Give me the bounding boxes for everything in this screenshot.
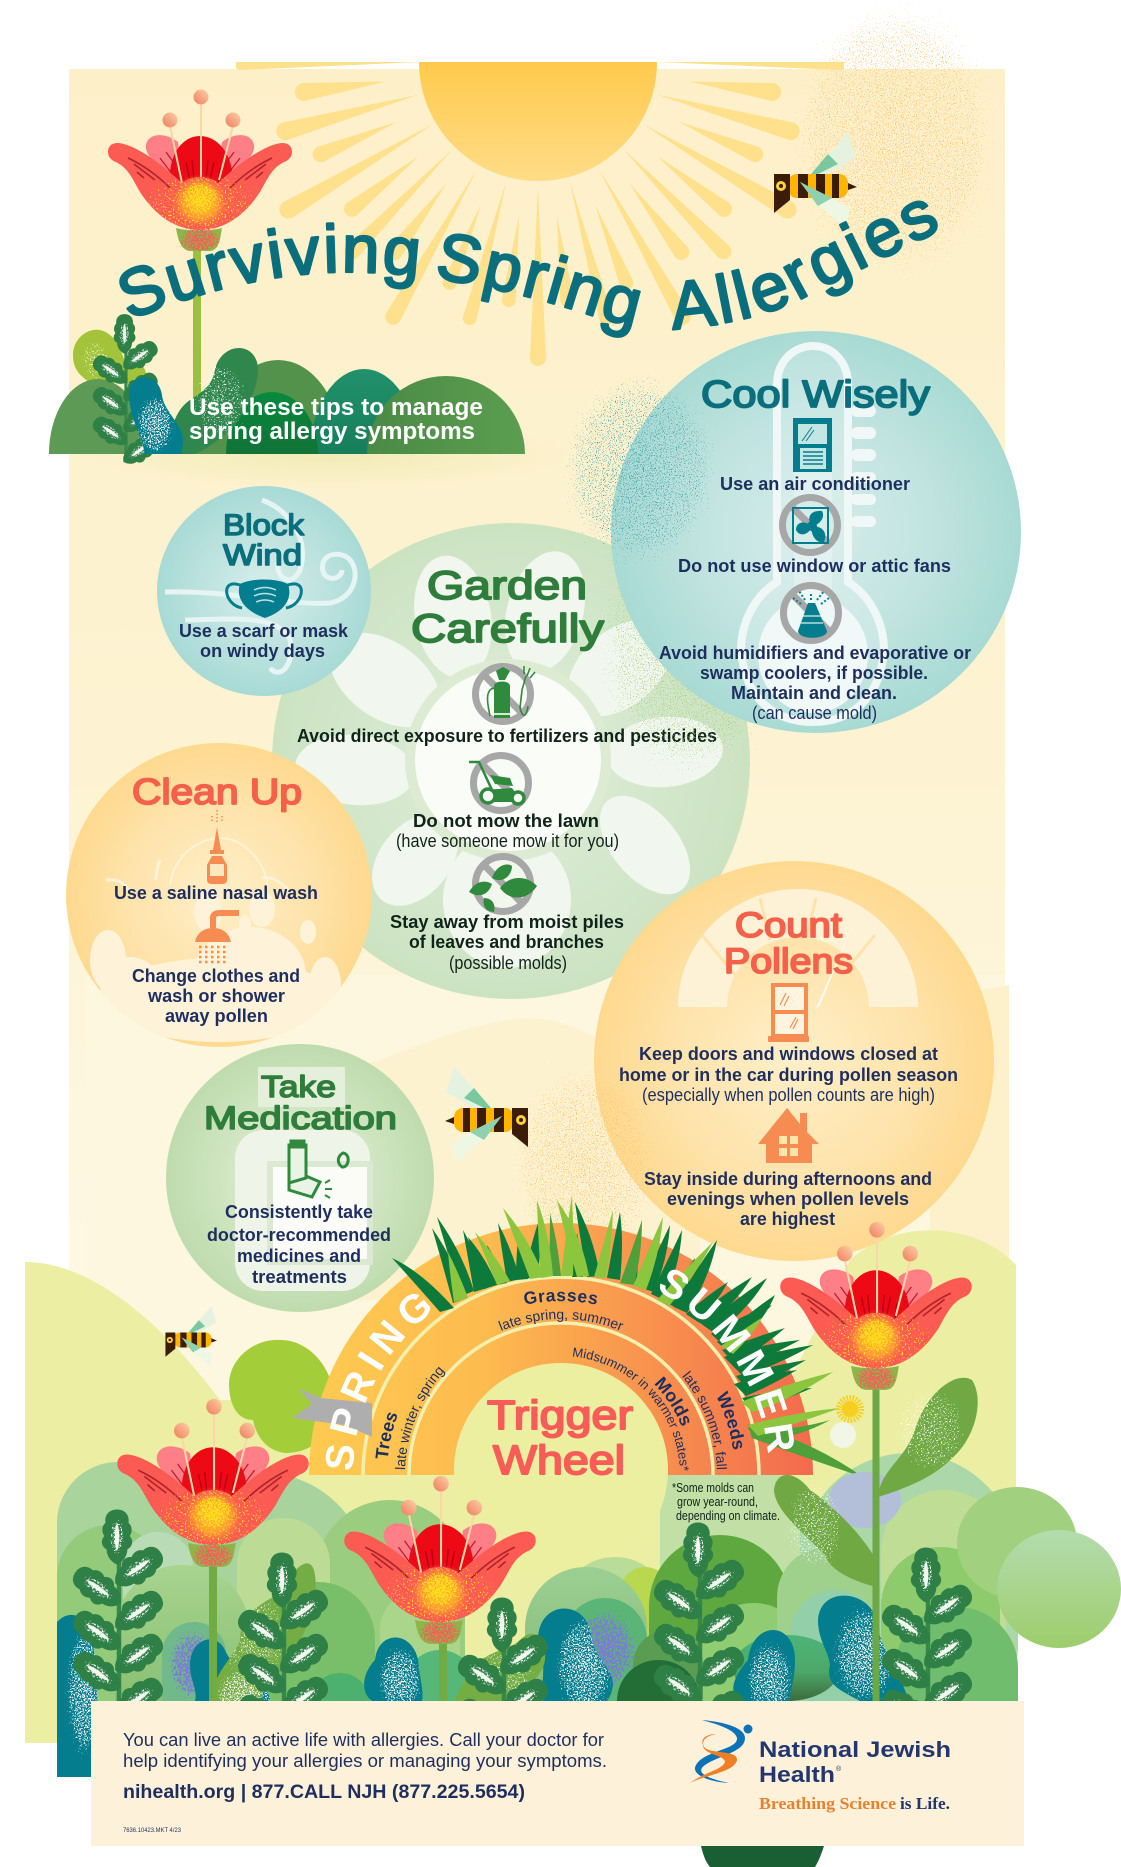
centre circle	[454, 1363, 668, 1577]
title: Surviving	[119, 222, 419, 316]
text: fertilizers: Avoid direct exposure to fertilizers and pesticides	[297, 725, 717, 746]
bottom green tab	[701, 1846, 824, 1867]
trigger: grasses: Grasses	[524, 1291, 598, 1304]
green pollen speckle	[570, 460, 810, 820]
text: humidifiers	[659, 642, 971, 723]
trigger: grasses	[498, 1291, 624, 1331]
balls, far right	[957, 1487, 1121, 1648]
tree	[229, 1340, 333, 1453]
middle flower	[344, 1476, 536, 1701]
background hills	[25, 975, 1016, 1743]
dandelions	[830, 1398, 861, 1448]
title: Spring	[438, 234, 641, 338]
heading: Clean Up	[132, 771, 302, 812]
flower petals decoration	[292, 542, 726, 968]
logo: national jewish health: is Life.	[900, 1794, 950, 1813]
grass	[392, 1195, 863, 1477]
logo: national jewish health: ®	[836, 1765, 842, 1773]
text: mow	[396, 810, 619, 851]
heading	[724, 906, 853, 981]
text: shower	[132, 965, 300, 1026]
footer message	[123, 1730, 607, 1834]
footer message: help identifying your allergies or managing your symptoms.	[123, 1751, 607, 1771]
text: doors and windows: (especially when pollen counts are high)	[642, 1085, 935, 1105]
panel: block wind	[157, 486, 371, 696]
footer message: You can live an active life with allergies. Call your doctor for	[123, 1730, 604, 1750]
text: Consistently take	[225, 1201, 373, 1222]
panel: count pollens	[594, 861, 994, 1261]
heading: Medication	[204, 1100, 397, 1136]
sun with rays	[236, 62, 844, 366]
trigger: weeds: Weeds	[717, 1390, 744, 1450]
heading	[204, 1069, 397, 1136]
icon: sprayer	[476, 666, 535, 722]
trigger: grasses: late spring, summer	[498, 1310, 624, 1331]
text: stay inside: Stay inside during afternoons and	[644, 1168, 932, 1189]
trigger: molds: Molds	[654, 1376, 690, 1426]
scene: ground foliage front layer	[57, 1535, 1018, 1777]
hills with subtitle, top left	[49, 314, 580, 548]
molds footnote: *Some molds can	[672, 1481, 754, 1495]
text: mow: (have someone mow it for you)	[396, 831, 619, 851]
icon: thermometer outline	[741, 346, 884, 722]
icon: leaves	[469, 856, 537, 912]
white speckle on leaves	[66, 1603, 890, 1759]
subtitle: Use these tips to manage	[189, 394, 483, 421]
icon: lawn mower	[469, 756, 528, 810]
scene: ground foliage back layer	[57, 1453, 1018, 1701]
text: humidifiers: swamp coolers, if possible.	[700, 662, 928, 683]
icon: inhaler	[289, 1141, 348, 1198]
text: moist piles	[390, 911, 624, 973]
tree trunk	[292, 1388, 372, 1437]
text: stay inside	[644, 1168, 932, 1229]
teal pollen speckle	[540, 345, 740, 595]
teal leaves	[57, 1596, 908, 1777]
icon: no humidifier	[784, 586, 838, 640]
text: mow: Do not mow the lawn	[413, 810, 599, 831]
text: on windy days	[200, 640, 325, 661]
orange pollen speckle, lower	[490, 1035, 680, 1295]
molds footnote: grow year-round,	[677, 1495, 758, 1509]
text: shower: away pollen	[165, 1005, 268, 1026]
icon: no fan	[782, 498, 838, 552]
green leaves	[210, 1563, 545, 1701]
text: medicines and	[237, 1245, 361, 1266]
flower, top left	[108, 90, 292, 400]
right flower with leaves	[774, 1222, 978, 1701]
subtitle: spring allergy symptoms	[189, 418, 475, 445]
text: doors and windows: Keep doors and windows closed at	[639, 1043, 938, 1064]
bottom-left flower	[117, 1399, 309, 1701]
heading: Cool Wisely	[701, 374, 930, 416]
icon: shower	[195, 913, 239, 962]
logo: national jewish health: National Jewish	[759, 1737, 951, 1762]
molds footnote: depending on climate.	[676, 1509, 780, 1523]
text	[179, 620, 349, 661]
heading	[223, 509, 305, 572]
icon: window	[768, 985, 809, 1042]
logo: national jewish health: Breathing Science	[759, 1794, 896, 1813]
decorative shapes	[235, 1067, 370, 1291]
foam decoration	[90, 838, 341, 1042]
text: stay inside: are highest	[740, 1208, 835, 1229]
title: trigger wheel: Wheel	[493, 1437, 625, 1483]
icon: air conditioner	[793, 418, 832, 472]
bee, lower left small	[165, 1307, 217, 1366]
season label: spring: SPRING	[326, 1294, 430, 1470]
footer panel	[91, 1701, 1024, 1846]
trigger: molds: Midsummer in warmer states*	[572, 1348, 689, 1471]
orange pollen speckle, top right	[760, 0, 1030, 320]
title	[119, 200, 938, 338]
logo: national jewish health: Health	[759, 1762, 835, 1787]
trigger: trees: Trees	[375, 1412, 397, 1458]
trigger: trees: late winter, spring	[394, 1366, 446, 1470]
sun arch decoration	[678, 889, 918, 1007]
text: shower: Change clothes and	[132, 965, 300, 986]
panel: garden carefully	[272, 523, 750, 999]
text: doctor-recommended	[207, 1224, 391, 1245]
heading: Count	[735, 906, 842, 945]
heading: Take	[261, 1069, 336, 1104]
text: shower: wash or shower	[147, 985, 285, 1006]
text: moist piles: (possible molds)	[449, 953, 567, 973]
heading: Block	[223, 509, 305, 542]
background panel	[69, 69, 1005, 1399]
title: Allergies	[672, 200, 938, 331]
panel: take medication	[166, 1044, 434, 1312]
heading	[411, 564, 604, 651]
icon: nasal spray	[207, 810, 227, 884]
text: fans: Do not use window or attic fans	[678, 555, 951, 576]
text: doors and windows: home or in the car during pollen season	[619, 1064, 958, 1085]
bee, middle	[445, 1066, 528, 1162]
heading: Pollens	[724, 942, 853, 981]
title: trigger wheel	[487, 1392, 633, 1483]
title: trigger wheel: Trigger	[487, 1392, 633, 1438]
text: air conditioner: Use an air conditioner	[720, 473, 910, 494]
molds footnote	[672, 1481, 780, 1523]
text: nasal wash: Use a saline nasal wash	[114, 882, 318, 903]
icon: mask	[227, 580, 301, 618]
footer message: nihealth.org | 877.CALL NJH (877.225.5654)	[123, 1782, 525, 1803]
footer message: 7636.10423.MKT 4/23	[123, 1828, 182, 1834]
text: humidifiers: (can cause mold)	[752, 703, 877, 723]
heading: Wind	[223, 539, 302, 572]
bee, top right	[774, 132, 857, 228]
logo: national jewish health	[690, 1720, 951, 1813]
text: Use a scarf or mask	[179, 620, 349, 641]
heading: Garden	[427, 564, 587, 608]
text: humidifiers: Maintain and clean.	[731, 682, 897, 703]
trigger: weeds: late summer, fall	[682, 1370, 727, 1470]
panel: cool wisely	[611, 331, 1021, 733]
text: doors and windows	[619, 1043, 958, 1105]
text: moist piles: of leaves and branches	[409, 931, 604, 952]
wheel bands	[309, 1223, 813, 1475]
text: humidifiers: Avoid humidifiers and evaporative or	[659, 642, 971, 663]
heading: Carefully	[411, 607, 604, 651]
text: moist piles: Stay away from moist piles	[390, 911, 624, 932]
trigger wheel	[292, 1195, 857, 1510]
ferns	[67, 1509, 978, 1815]
text: stay inside: evenings when pollen levels	[667, 1188, 909, 1209]
text	[207, 1201, 391, 1287]
text: treatments	[252, 1266, 347, 1287]
wind swirls	[165, 500, 355, 672]
season label: summer: SUMMER	[660, 1270, 794, 1454]
panel: clean up	[66, 743, 372, 1047]
subtitle	[189, 394, 483, 445]
dna mark	[690, 1720, 752, 1783]
icon: house	[758, 1108, 819, 1163]
